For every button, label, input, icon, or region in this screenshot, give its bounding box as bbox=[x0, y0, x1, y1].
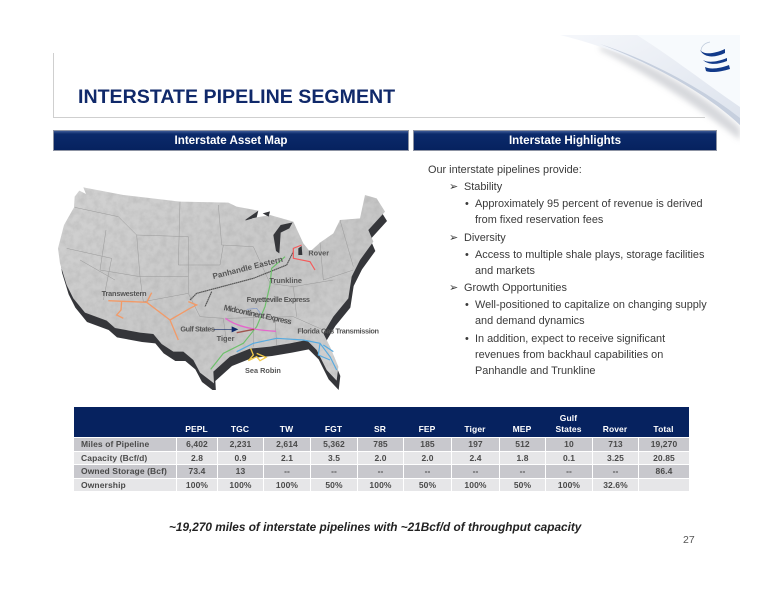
pipeline data table: 50% bbox=[419, 480, 436, 490]
pipeline data table: 5,362 bbox=[323, 439, 345, 449]
Stability detail bbox=[465, 198, 703, 226]
pipeline: Midcontinent Express bbox=[225, 318, 276, 331]
pipeline: Transwestern bbox=[108, 293, 197, 340]
pipeline data table: 100% bbox=[369, 480, 392, 490]
pipeline data table: 73.4 bbox=[189, 466, 205, 476]
Stability detail: from fixed reservation fees bbox=[475, 214, 603, 226]
pipeline data table: 2.0 bbox=[374, 453, 387, 463]
pipeline data table: Capacity (Bcf/d) bbox=[81, 453, 147, 463]
pipeline data table: 2,231 bbox=[230, 439, 251, 449]
heading: Interstate Highlights bbox=[413, 130, 717, 151]
pipeline data table: 100% bbox=[229, 480, 252, 490]
pipeline data table: Tiger bbox=[464, 424, 486, 434]
pipeline data table: 13 bbox=[236, 466, 245, 476]
pipeline data table bbox=[74, 407, 689, 491]
pipeline data table: 86.4 bbox=[656, 466, 672, 476]
Stability bbox=[449, 181, 502, 193]
pipeline data table: 10 bbox=[564, 439, 574, 449]
Diversity detail: and markets bbox=[475, 265, 535, 277]
pipeline data table: 3.5 bbox=[328, 453, 340, 463]
state borders bbox=[67, 202, 353, 347]
pipeline data table: Gulf bbox=[560, 413, 577, 423]
Growth detail 2 bbox=[465, 333, 666, 377]
label: Trunkline: Trunkline bbox=[269, 276, 302, 285]
label: Midcontinent Express: Midcontinent Express bbox=[223, 303, 293, 326]
Growth detail 2: revenues from backhaul capabilities on bbox=[475, 349, 663, 361]
Stability detail: Approximately 95 percent of revenue is derived bbox=[475, 198, 703, 210]
land bbox=[58, 187, 385, 383]
pipeline data table: 785 bbox=[373, 439, 388, 449]
pipeline data table: 2,614 bbox=[276, 439, 298, 449]
pipeline: Rover bbox=[293, 245, 315, 270]
pipeline data table: -- bbox=[284, 466, 290, 476]
pipeline data table: States bbox=[555, 424, 582, 434]
title: INTERSTATE PIPELINE SEGMENT bbox=[78, 86, 395, 108]
pipeline data table: Rover bbox=[603, 424, 627, 434]
Diversity detail: Access to multiple shale plays, storage facilities bbox=[475, 249, 704, 261]
highlights text block: ➢ bbox=[449, 181, 458, 193]
pipeline data table: 2.8 bbox=[191, 453, 203, 463]
pipeline: Sea Robin bbox=[248, 348, 266, 361]
Growth detail 2: Panhandle and Trunkline bbox=[475, 365, 596, 377]
Diversity detail bbox=[465, 249, 704, 277]
label: Gulf States: Gulf States bbox=[180, 325, 215, 334]
highlights text block: ➢ bbox=[449, 232, 458, 244]
pipeline data table: 100% bbox=[276, 480, 298, 490]
pipeline data table: -- bbox=[520, 466, 525, 476]
label: Florida Gas Transmission: Florida Gas Transmission bbox=[297, 327, 380, 336]
terrain texture bbox=[58, 187, 385, 383]
pipeline data table: 512 bbox=[515, 439, 530, 449]
header swoosh background bbox=[562, 35, 740, 140]
pipeline data table: Total bbox=[653, 424, 674, 434]
Growth detail 1: Well-positioned to capitalize on changing supply bbox=[475, 299, 707, 311]
pipeline data table: Ownership bbox=[81, 480, 126, 490]
label: Rover: Rover bbox=[308, 248, 329, 257]
pipeline data table: TW bbox=[280, 424, 293, 434]
pipeline data table: Miles of Pipeline bbox=[81, 439, 149, 449]
pipeline data table: 19,270 bbox=[651, 439, 677, 449]
heading: Interstate Asset Map bbox=[53, 130, 409, 151]
pipeline data table: 197 bbox=[468, 439, 483, 449]
pipeline data table: 0.1 bbox=[563, 453, 575, 463]
pipeline: Trunkline bbox=[211, 257, 285, 369]
pipeline data table: FEP bbox=[419, 424, 435, 434]
map labels bbox=[102, 248, 380, 375]
Diversity bbox=[449, 232, 506, 244]
label: Transwestern: Transwestern bbox=[102, 289, 147, 298]
arrow: Gulf States bbox=[214, 326, 238, 332]
pipeline: Tiger bbox=[237, 329, 254, 333]
map extrusion shadow bbox=[60, 197, 387, 393]
label: Sea Robin: Sea Robin bbox=[245, 366, 281, 375]
label: Fayetteville Express: Fayetteville Express bbox=[247, 295, 310, 304]
pipeline data table: -- bbox=[331, 466, 337, 476]
label: Panhandle Eastern: Panhandle Eastern bbox=[212, 255, 284, 281]
Growth detail 1: • bbox=[465, 299, 469, 311]
highlights text block: Diversity bbox=[464, 232, 506, 244]
pipeline: Panhandle Eastern bbox=[190, 252, 293, 307]
US pipeline map bbox=[58, 188, 387, 390]
label: Tiger: Tiger bbox=[217, 334, 235, 343]
Diversity detail: • bbox=[465, 249, 469, 261]
pipeline data table: 185 bbox=[420, 439, 435, 449]
pipeline data table: MEP bbox=[513, 424, 531, 434]
pipeline data table: 2.0 bbox=[421, 453, 434, 463]
logo icon bbox=[700, 42, 730, 72]
pipeline data table: 3.25 bbox=[607, 453, 624, 463]
Growth detail 1 bbox=[465, 299, 707, 327]
pipeline data table: 100% bbox=[558, 480, 580, 490]
Growth detail 2: • bbox=[465, 333, 469, 345]
pipeline data table: 6,402 bbox=[186, 439, 208, 449]
pipeline data table: 713 bbox=[608, 439, 623, 449]
pipeline data table: FGT bbox=[325, 424, 342, 434]
pipeline data table: 50% bbox=[514, 480, 531, 490]
pipeline data table: -- bbox=[473, 466, 478, 476]
Stability detail: • bbox=[465, 198, 469, 210]
heading: Interstate Asset Map: Interstate Asset Map bbox=[175, 134, 287, 147]
highlights text block: Growth Opportunities bbox=[464, 282, 567, 294]
page number: 27 bbox=[683, 534, 695, 546]
pipeline data table: -- bbox=[566, 466, 572, 476]
heading: Interstate Highlights: Interstate Highlights bbox=[509, 134, 621, 147]
header frame lines bbox=[53, 53, 705, 118]
pipeline data table: 2.1 bbox=[281, 453, 293, 463]
pipeline data table: SR bbox=[374, 424, 386, 434]
great lakes bbox=[245, 211, 302, 255]
highlights text block: Stability bbox=[464, 181, 502, 193]
pipeline data table: -- bbox=[425, 466, 430, 476]
pipeline data table: PEPL bbox=[185, 424, 208, 434]
pipeline: Florida Gas Transmission bbox=[237, 338, 337, 370]
Growth detail 2: In addition, expect to receive significant bbox=[475, 333, 665, 345]
pipeline data table: 100% bbox=[186, 480, 208, 490]
pipeline data table: -- bbox=[613, 466, 618, 476]
intro line: Our interstate pipelines provide: bbox=[428, 164, 582, 176]
pipeline data table: 2.4 bbox=[469, 453, 482, 463]
pipeline data table: 32.6% bbox=[603, 480, 628, 490]
highlights text block bbox=[428, 164, 707, 377]
highlights text block: ➢ bbox=[449, 282, 458, 294]
pipeline data table: 100% bbox=[464, 480, 487, 490]
pipeline: Fayetteville Express bbox=[247, 308, 262, 315]
pipeline data table: 0.9 bbox=[234, 453, 247, 463]
pipeline data table: -- bbox=[378, 466, 383, 476]
Growth detail 1: and demand dynamics bbox=[475, 315, 585, 327]
pipeline data table: 20.85 bbox=[653, 453, 675, 463]
Growth Opportunities bbox=[449, 282, 567, 294]
pipeline data table: 1.8 bbox=[516, 453, 529, 463]
pipeline data table: 50% bbox=[325, 480, 343, 490]
summary callout: ~19,270 miles of interstate pipelines with ~21Bcf/d of throughput capacity bbox=[169, 520, 581, 534]
pipeline data table: Owned Storage (Bcf) bbox=[81, 466, 167, 476]
pipeline data table: TGC bbox=[231, 424, 249, 434]
